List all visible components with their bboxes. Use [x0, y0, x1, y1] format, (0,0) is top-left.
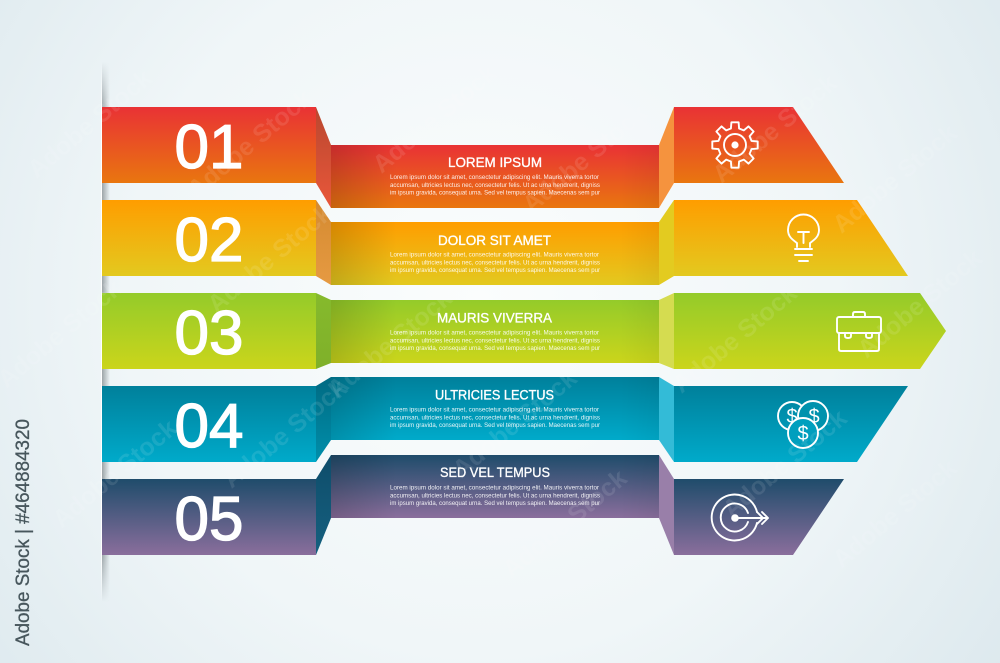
watermarks: Adobe Stock	[22, 64, 157, 184]
text block	[390, 484, 601, 507]
icon: coins: $	[797, 423, 809, 445]
text block: accumsan, ultricies lectus nec, consectetur felis. Ut ac urna hendrerit, digniss	[390, 338, 601, 344]
watermarks: Adobe Stock	[182, 84, 317, 204]
watermarks: Adobe Stock	[852, 244, 987, 364]
watermarks: Adobe Stock	[827, 454, 962, 574]
centre panel	[331, 377, 659, 440]
watermarks: Adobe Stock	[707, 69, 842, 189]
icon: coins	[778, 401, 828, 448]
left panel 03: 03	[175, 299, 243, 368]
left panel 01	[102, 107, 316, 183]
watermarks: Adobe Stock	[367, 59, 502, 179]
left panel 03	[102, 293, 316, 369]
icon: gear	[712, 122, 758, 168]
text block: accumsan, ultricies lectus nec, consectetur felis. Ut ac urna hendrerit, digniss	[390, 414, 601, 422]
stock id label: Adobe Stock | #464884320	[13, 419, 34, 646]
watermarks: Adobe Stock	[667, 279, 802, 399]
icon: coins: $	[786, 406, 798, 428]
heading: ULTRICIES LECTUS	[435, 386, 554, 402]
watermarks: Adobe Stock	[717, 404, 852, 524]
text block: Lorem ipsum dolor sit amet, consectetur adipiscing elit. Mauris viverra tortor	[390, 252, 600, 258]
watermarks: Adobe Stock	[497, 464, 632, 584]
text block: accumsan, ultricies lectus nec, consectetur felis. Ut ac urna hendrerit, digniss	[390, 182, 601, 189]
left panel 05: 05	[175, 485, 243, 554]
watermarks: Adobe Stock	[47, 414, 182, 534]
icon: light bulb	[788, 214, 819, 261]
heading: DOLOR SIT AMET	[438, 232, 551, 248]
left panel 02	[102, 200, 316, 276]
text block: accumsan, ultricies lectus nec, consectetur felis. Ut ac urna hendrerit, digniss	[390, 492, 601, 500]
left panel 01: 01	[175, 113, 243, 182]
icon: target	[712, 494, 768, 540]
heading: LOREM IPSUM	[448, 154, 542, 170]
left panel 05	[102, 479, 316, 555]
watermarks: Adobe Stock	[217, 374, 352, 494]
left panel 02: 02	[175, 206, 243, 275]
watermarks: Adobe Stock	[827, 119, 962, 239]
text block: im ipsum gravida, consequat urna. Sed vel tempus sapien. Maecenas sem pur	[390, 500, 601, 507]
right arrow panel	[674, 107, 844, 183]
heading: SED VEL TEMPUS	[440, 464, 550, 480]
right arrow panel	[674, 200, 908, 276]
text block: Lorem ipsum dolor sit amet, consectetur adipiscing elit. Mauris viverra tortor	[390, 484, 600, 492]
text block	[390, 174, 601, 196]
right arrow panel	[674, 479, 844, 555]
watermarks	[0, 59, 987, 584]
right fold	[659, 107, 674, 208]
right arrow panel	[674, 293, 946, 369]
text block: accumsan, ultricies lectus nec, consectetur felis. Ut ac urna hendrerit, digniss	[390, 260, 601, 266]
step 1 ribbon	[102, 107, 844, 208]
icon: briefcase	[837, 312, 881, 351]
step 3 ribbon	[102, 293, 946, 369]
right arrow panel	[674, 386, 908, 462]
left fold	[316, 200, 331, 285]
text block	[390, 252, 601, 274]
text block	[390, 406, 601, 429]
watermarks: Adobe Stock	[322, 284, 457, 404]
text block: im ipsum gravida, consequat urna. Sed vel tempus sapien. Maecenas sem pur	[390, 190, 601, 196]
left panel 04	[102, 386, 316, 462]
icon: coins: $	[808, 406, 820, 428]
paper slit shadow	[101, 62, 110, 602]
watermarks: Adobe Stock	[447, 364, 582, 484]
left fold	[316, 293, 331, 369]
text block: Lorem ipsum dolor sit amet, consectetur adipiscing elit. Mauris viverra tortor	[390, 406, 600, 414]
centre panel	[331, 222, 659, 285]
text block: Lorem ipsum dolor sit amet, consectetur adipiscing elit. Mauris viverra tortor	[390, 174, 600, 181]
heading: MAURIS VIVERRA	[437, 310, 553, 326]
text block: im ipsum gravida, consequat urna. Sed vel tempus sapien. Maecenas sem pur	[390, 422, 601, 429]
watermarks: Adobe Stock	[517, 99, 652, 219]
right fold	[659, 377, 674, 462]
text block: im ipsum gravida, consequat urna. Sed vel tempus sapien. Maecenas sem pur	[390, 345, 601, 352]
text block: im ipsum gravida, consequat urna. Sed vel tempus sapien. Maecenas sem pur	[390, 267, 601, 274]
step 4 ribbon	[102, 377, 908, 462]
text block	[390, 330, 601, 352]
right fold	[659, 293, 674, 369]
text block: Lorem ipsum dolor sit amet, consectetur adipiscing elit. Mauris viverra tortor	[390, 330, 600, 336]
centre panel	[331, 455, 659, 518]
centre panel	[331, 145, 659, 208]
left fold	[316, 377, 331, 462]
left fold	[316, 107, 331, 208]
left panel 04: 04	[175, 392, 243, 461]
left fold	[316, 455, 331, 555]
centre panel	[331, 300, 659, 363]
step 5 ribbon	[102, 455, 844, 555]
step 2 ribbon	[102, 200, 908, 285]
right fold	[659, 455, 674, 555]
right fold	[659, 200, 674, 285]
watermarks: Adobe Stock	[202, 199, 337, 319]
